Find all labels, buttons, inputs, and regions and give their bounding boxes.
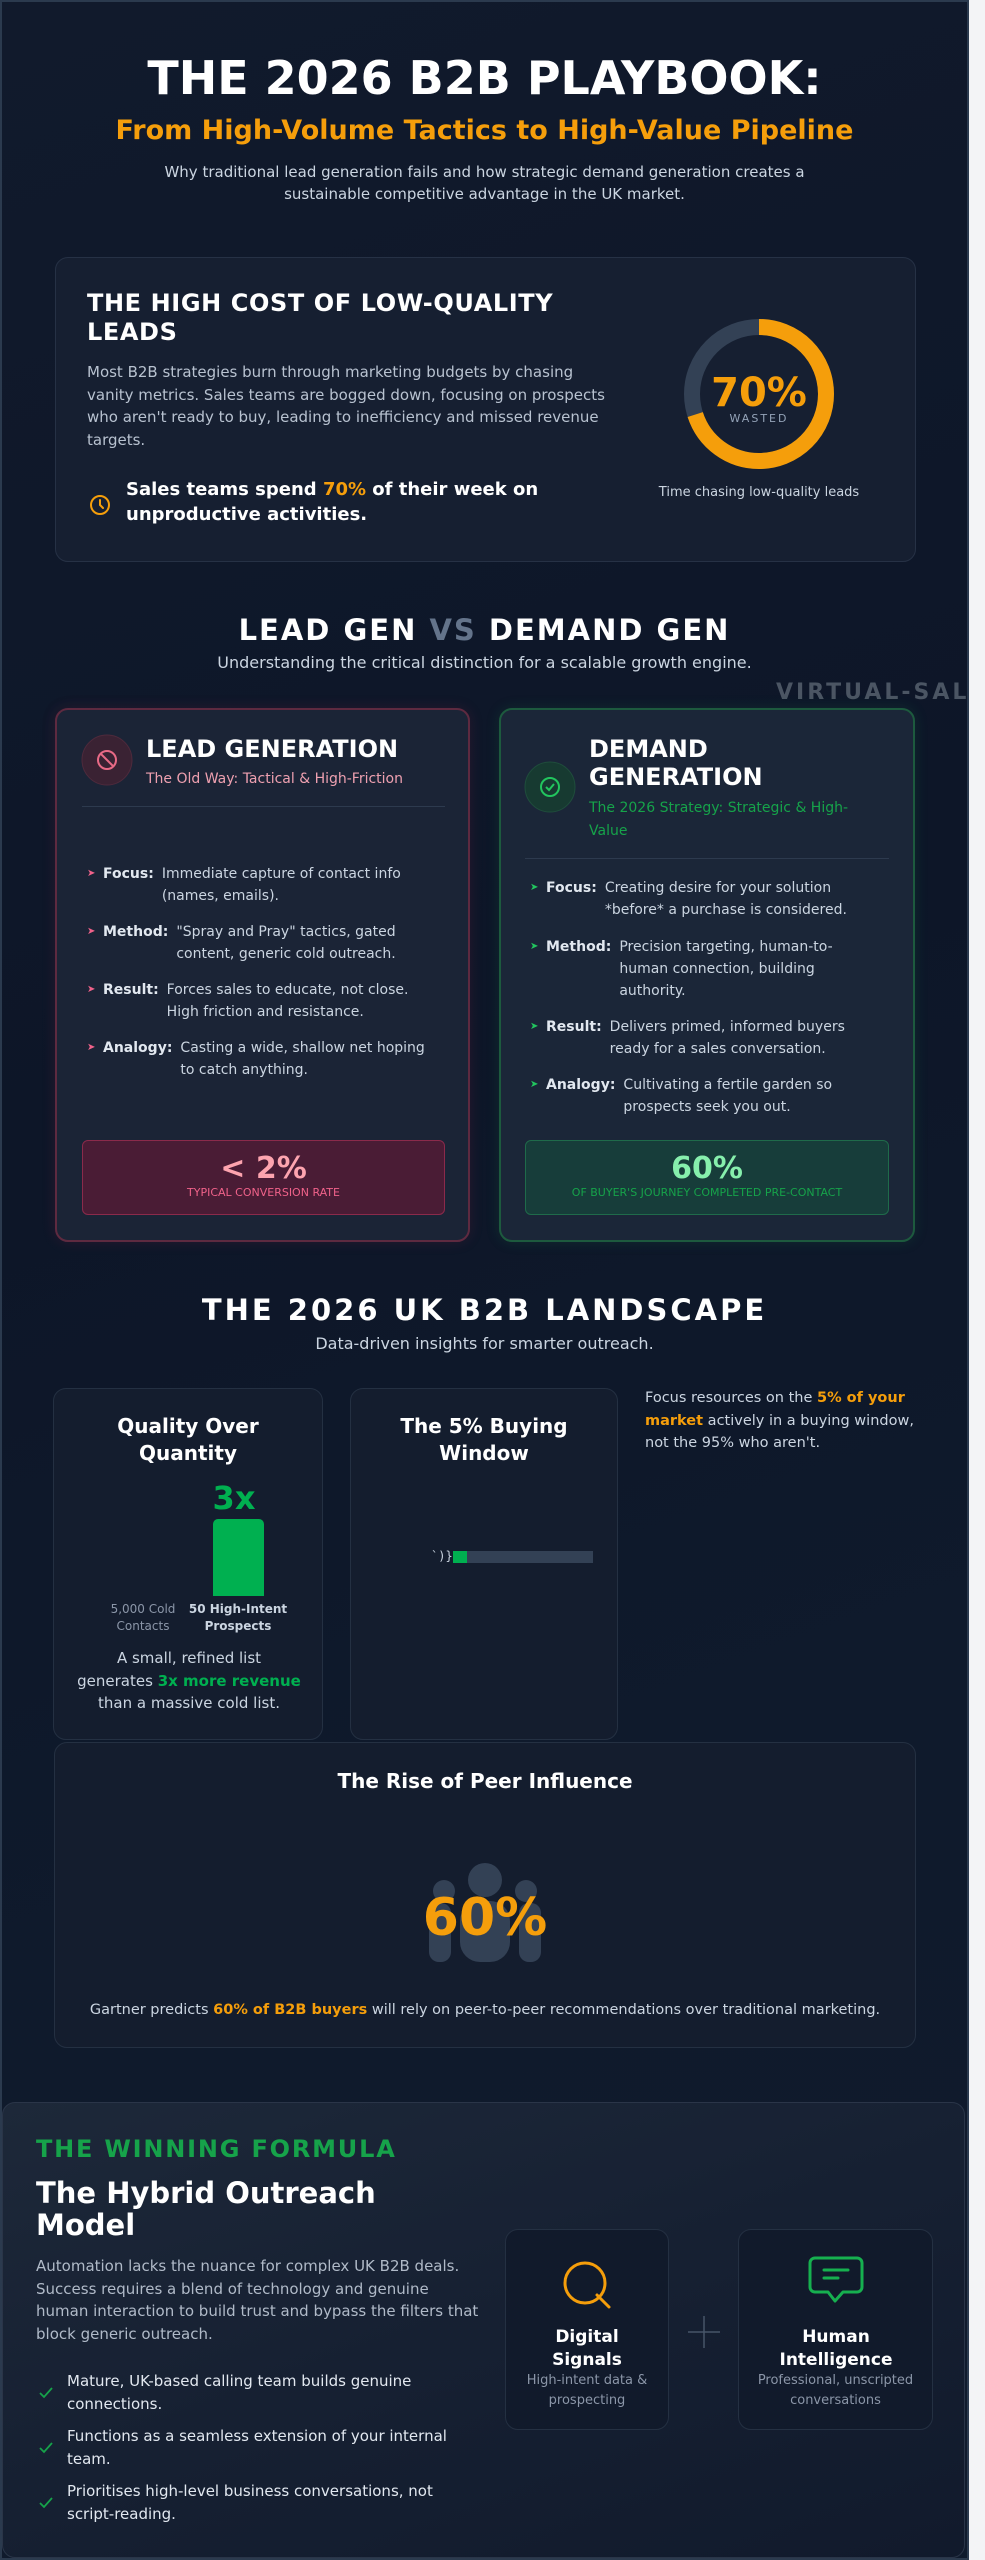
demand gen bullets: ➤	[530, 1079, 538, 1090]
panel: lead generation	[55, 708, 470, 1242]
demand gen bullets: Creating desire for your solution *before* a purchase is considered.	[605, 880, 847, 918]
stat: buyer journey	[525, 1140, 889, 1215]
panel: demand generation	[499, 708, 915, 1242]
demand gen bullets: Precision targeting, human-to-human connection, building authority.	[619, 939, 833, 999]
demand gen bullets: ➤	[530, 1021, 538, 1032]
icon: search	[564, 2262, 611, 2309]
demand gen bullets: ➤	[530, 941, 538, 952]
demand gen title: DEMAND GENERATION	[589, 735, 763, 791]
lead gen bullets: ➤	[87, 984, 95, 995]
lead gen bullets: Result:	[103, 982, 159, 998]
heading: high cost: THE HIGH COST OF LOW-QUALITY LEADS	[87, 289, 553, 346]
lead gen bullets: Method:	[103, 924, 168, 940]
bar: 5%	[431, 1549, 593, 1563]
heading: lead gen vs demand gen: LEAD GEN VS DEMAND GEN	[239, 613, 730, 647]
bar chart: 3x: 3x	[213, 1479, 255, 1517]
bar chart: 3x	[111, 1479, 287, 1633]
donut chart: 70% wasted: WASTED	[730, 412, 788, 425]
card title: The Rise of Peer Influence	[337, 1769, 633, 1793]
icon: chat	[808, 2256, 864, 2303]
lead gen bullets: ➤	[87, 1042, 95, 1053]
panel: high cost	[55, 257, 916, 562]
lead gen bullets: ➤	[87, 868, 95, 879]
card text	[77, 1649, 301, 1712]
card: human intelligence: Human Intelligence	[780, 2327, 892, 2370]
lead gen bullets	[87, 866, 425, 1078]
card text: than a massive cold list.	[98, 1694, 280, 1712]
subheading: Data-driven insights for smarter outreach.	[315, 1334, 654, 1353]
card: human intelligence	[738, 2229, 933, 2430]
lead gen bullets: "Spray and Pray" tactics, gated content, generic cold outreach.	[176, 924, 396, 962]
heading: hybrid model: The Hybrid Outreach Model	[36, 2176, 376, 2242]
stat: conversion rate: < 2%	[220, 1151, 307, 1186]
icon: check circle	[524, 762, 576, 812]
donut caption: Time chasing low-quality leads	[659, 485, 859, 500]
card title: The 5% Buying Window	[400, 1414, 568, 1465]
lead gen bullets: Analogy:	[103, 1040, 172, 1056]
intro text: Why traditional lead generation fails and how strategic demand generation creates a sustainable competitive advantage in the UK market.	[164, 163, 805, 203]
body text: human interaction to build trust and bypass the filters that	[36, 2302, 478, 2320]
caption: Gartner predicts 60% of B2B buyers will rely on peer-to-peer recommendations over traditional marketing.	[90, 2002, 880, 2018]
lead gen bullets: ➤	[87, 926, 95, 937]
stat: buyer journey: OF BUYER'S JOURNEY COMPLETED PRE-CONTACT	[572, 1186, 842, 1199]
icon: people with 60%: 60%	[423, 1888, 547, 1948]
card text: generates 3x more revenue	[77, 1672, 301, 1690]
checklist: Functions as a seamless extension of your internal team.	[67, 2427, 447, 2468]
card title: Quality Over Quantity	[117, 1414, 259, 1465]
panel: 5% buying window	[350, 1388, 618, 1740]
body text: block generic outreach.	[36, 2324, 213, 2342]
demand gen bullets: Analogy:	[546, 1077, 615, 1093]
lead gen title: LEAD GENERATION	[146, 735, 398, 763]
panel: winning formula	[2, 2102, 965, 2558]
donut chart: 70% wasted: 70%	[711, 370, 807, 416]
body text	[36, 2257, 478, 2342]
title: THE 2026 B2B PLAYBOOK:	[147, 51, 822, 105]
subtitle: From High-Volume Tactics to High-Value Pipeline	[116, 115, 853, 146]
demand gen bullets	[530, 880, 847, 1115]
card: digital signals: High-intent data & prospecting	[527, 2373, 647, 2408]
callout: 70% of week: Sales teams spend 70% of their week on unproductive activities.	[126, 479, 538, 525]
checklist: Mature, UK-based calling team builds genuine connections.	[67, 2372, 411, 2412]
icon: clock	[90, 495, 110, 515]
donut chart: 70% wasted	[684, 319, 834, 469]
stat: conversion rate: TYPICAL CONVERSION RATE	[187, 1186, 340, 1199]
card: human intelligence: Professional, unscripted conversations	[758, 2373, 913, 2408]
panel: quality over quantity	[53, 1388, 323, 1740]
card text: A small, refined list	[117, 1649, 261, 1667]
icon: plus	[688, 2316, 720, 2348]
lead gen bullets: Focus:	[103, 866, 154, 882]
subheading: Understanding the critical distinction for a scalable growth engine.	[217, 653, 752, 672]
demand gen bullets: Result:	[546, 1019, 602, 1035]
demand gen bullets: Cultivating a fertile garden so prospects seek you out.	[623, 1077, 832, 1115]
demand gen bullets: Delivers primed, informed buyers ready for a sales conversation.	[610, 1019, 845, 1057]
checklist	[39, 2372, 447, 2522]
stat: buyer journey: 60%	[671, 1151, 743, 1186]
card: digital signals: Digital Signals	[552, 2327, 622, 2370]
demand gen bullets: Method:	[546, 939, 611, 955]
checklist: Prioritises high-level business conversations, not script-reading.	[67, 2482, 433, 2522]
bar: 5%: `)}	[431, 1549, 453, 1563]
demand gen subtitle: The 2026 Strategy: Strategic & High-Value	[589, 800, 848, 839]
card: digital signals	[505, 2229, 669, 2430]
demand gen bullets: Focus:	[546, 880, 597, 896]
demand gen bullets: ➤	[530, 882, 538, 893]
panel: peer influence	[54, 1742, 916, 2048]
body text: Most B2B strategies burn through marketing budgets by chasing vanity metrics. Sales teams are bogged down, focusing on prospects who aren't ready to buy, leading to inefficiency and missed revenue targets.	[87, 363, 605, 448]
lead gen subtitle: The Old Way: Tactical & High-Friction	[146, 771, 403, 787]
bar chart: 3x: 50 High-Intent Prospects	[189, 1602, 287, 1633]
lead gen bullets: Immediate capture of contact info (names, emails).	[162, 866, 401, 904]
icon: ban	[82, 734, 132, 786]
eyebrow heading: THE WINNING FORMULA	[36, 2135, 397, 2163]
body text: Success requires a blend of technology and genuine	[36, 2280, 429, 2298]
body text: Automation lacks the nuance for complex UK B2B deals.	[36, 2257, 459, 2275]
text: focus resources: Focus resources on the 5% of your market actively in a buying window, not the 95% who aren't.	[645, 1390, 914, 1451]
heading: uk b2b landscape: THE 2026 UK B2B LANDSCAPE	[202, 1293, 767, 1327]
lead gen bullets: Casting a wide, shallow net hoping to catch anything.	[180, 1040, 425, 1078]
stat: conversion rate	[82, 1140, 445, 1215]
icon: people with 60%	[423, 1863, 547, 1962]
lead gen bullets: Forces sales to educate, not close. High friction and resistance.	[167, 982, 408, 1020]
bar chart: 3x: 5,000 Cold Contacts	[111, 1602, 175, 1633]
